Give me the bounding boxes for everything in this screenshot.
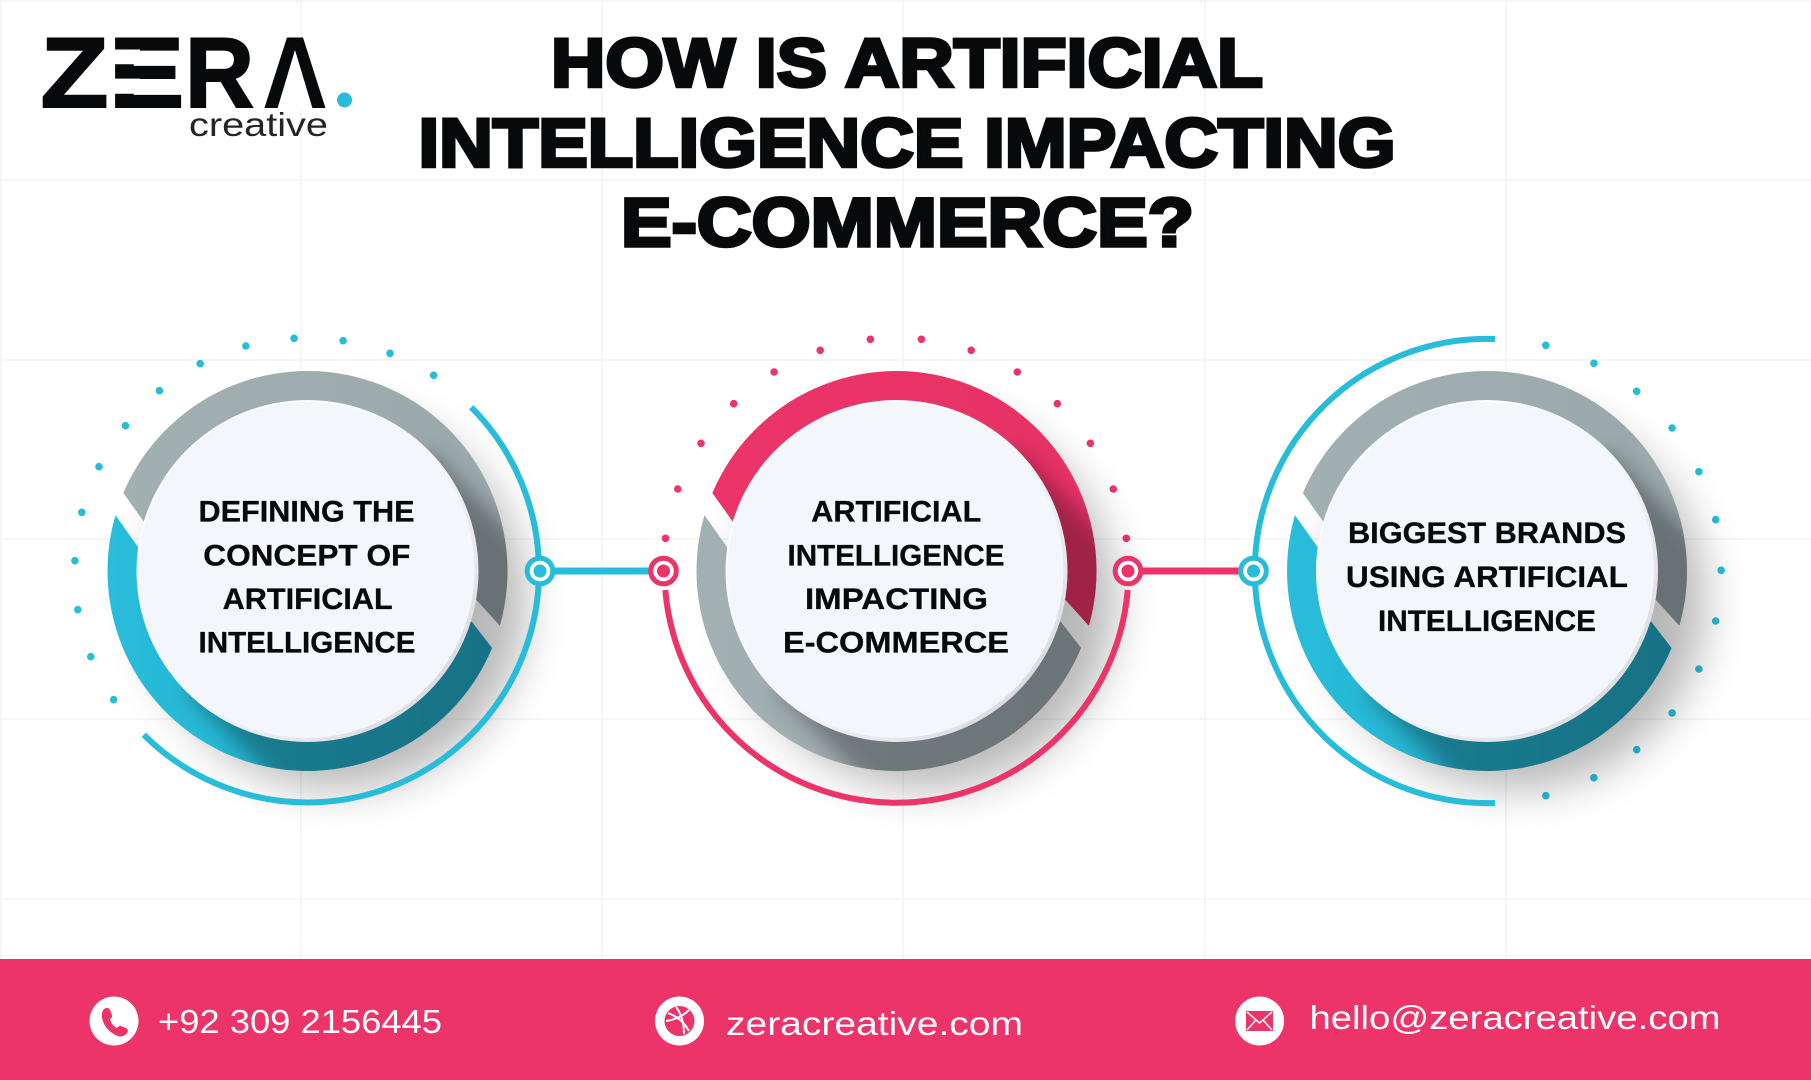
label text: INTELLIGENCE (198, 626, 416, 659)
label text (783, 496, 1009, 659)
dotted arc (662, 336, 1130, 542)
dotted arc (71, 334, 438, 704)
logo: Zera Creative: R (185, 17, 254, 128)
panel: defining the concept (71, 334, 549, 812)
ring and disc (108, 371, 549, 812)
label text: USING ARTIFICIAL (1346, 561, 1628, 594)
panel: AI impacting e-commerce (662, 336, 1138, 812)
label text: IMPACTING (805, 583, 988, 616)
connector: pink (1115, 558, 1253, 584)
panel: biggest brands (1252, 336, 1728, 812)
label text (1346, 517, 1628, 638)
label text: INTELLIGENCE (1378, 605, 1596, 638)
label text: BIGGEST BRANDS (1348, 517, 1626, 550)
title (418, 24, 1396, 261)
icon: mail (1235, 996, 1284, 1046)
connector node: teal right (1241, 558, 1266, 584)
title: INTELLIGENCE IMPACTING (418, 104, 1396, 181)
connector node: pink left (651, 558, 676, 584)
label text: DEFINING THE (198, 496, 414, 529)
logo: Zera Creative: A (264, 17, 326, 128)
footer text: phone: +92 309 2156445 (158, 1003, 442, 1040)
label text: ARTIFICIAL (223, 583, 393, 616)
label text (198, 496, 416, 659)
title: E-COMMERCE? (621, 184, 1194, 261)
logo: Zera Creative (40, 17, 352, 143)
dotted arc (1542, 342, 1725, 800)
ring and disc (662, 371, 1138, 812)
ring and disc (1252, 336, 1728, 812)
label text: ARTIFICIAL (811, 496, 981, 529)
logo: Zera Creative: E (109, 17, 184, 128)
connector: teal (527, 558, 663, 584)
footer text: email: hello@zeracreative.com (1310, 999, 1720, 1036)
logo: Zera Creative: creative (189, 106, 328, 143)
label text: INTELLIGENCE (788, 540, 1004, 573)
logo: Zera Creative: Z (40, 17, 108, 128)
footer text: website: zeracreative.com (726, 1005, 1023, 1042)
label text: CONCEPT OF (203, 540, 410, 573)
icon: website (655, 996, 704, 1046)
footer bar (0, 959, 1811, 1080)
title: HOW IS ARTIFICIAL (551, 24, 1263, 101)
label text: E-COMMERCE (783, 626, 1009, 659)
icon: phone (90, 996, 138, 1046)
